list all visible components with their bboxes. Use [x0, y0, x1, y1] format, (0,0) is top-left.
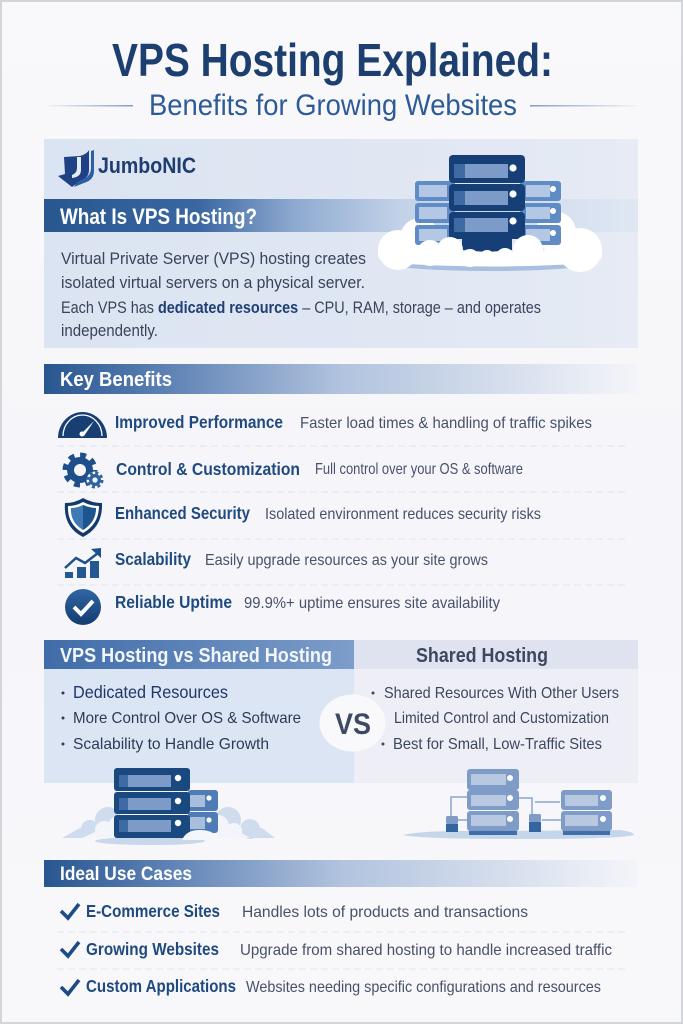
- use case: custom applications: Websites needing specific configurations and resources: [246, 979, 601, 996]
- subtitle: Benefits for Growing Websites: [149, 89, 517, 122]
- icon: gears: [65, 455, 104, 488]
- panel: VPS hosting column: More Control Over OS & Software: [73, 710, 301, 727]
- illustration: server stack on cloud: [378, 155, 602, 272]
- heading banner: ideal use cases: Ideal Use Cases: [60, 863, 192, 885]
- logo: JumboNIC: JumboNIC: [98, 153, 196, 178]
- panel: VPS hosting column: VPS Hosting vs Shared Hosting: [60, 644, 332, 667]
- benefit: enhanced security: Enhanced Security: [115, 503, 250, 523]
- benefit: enhanced security: Isolated environment reduces security risks: [265, 506, 541, 523]
- text: VPS description: [61, 249, 541, 340]
- benefit: scalability: [115, 549, 488, 569]
- use case: growing websites: Upgrade from shared hosting to handle increased traffic: [240, 942, 612, 959]
- use case: e-commerce sites: [61, 901, 528, 921]
- panel: what is VPS hosting: [44, 139, 638, 348]
- benefit: scalability: Easily upgrade resources as your site grows: [205, 552, 488, 569]
- text: VPS description: Virtual Private Server (VPS) hosting creates: [61, 249, 366, 268]
- icon: speedometer: [58, 412, 107, 438]
- heading banner: key benefits: Key Benefits: [60, 369, 172, 391]
- panel: VPS hosting column: Dedicated Resources: [73, 682, 228, 702]
- benefit: improved performance: Improved Performance: [115, 412, 283, 432]
- panel: shared hosting column: Limited Control and Customization: [394, 710, 609, 727]
- use case: custom applications: [61, 976, 601, 996]
- panel: shared hosting column: Shared Hosting: [416, 644, 548, 667]
- title: VPS Hosting Explained:: [112, 34, 553, 86]
- VS badge: VS: [335, 708, 371, 741]
- panel: shared hosting column: Shared Resources With Other Users: [384, 685, 619, 702]
- benefit: control and customization: [116, 459, 523, 479]
- panel: VPS hosting column: [44, 640, 354, 783]
- benefit: reliable uptime: 99.9%+ uptime ensures site availability: [244, 595, 500, 612]
- use case: e-commerce sites: E-Commerce Sites: [86, 901, 220, 921]
- panel: shared hosting column: Best for Small, Low-Traffic Sites: [393, 736, 602, 753]
- benefit: control and customization: Control & Customization: [116, 459, 300, 479]
- benefit: reliable uptime: Reliable Uptime: [115, 592, 232, 612]
- illustration: shared servers network: [403, 769, 634, 839]
- heading banner: what is VPS hosting: [44, 199, 638, 232]
- text: VPS description: Each VPS has dedicated resources – CPU, RAM, storage – and operates: [61, 298, 541, 317]
- panel: shared hosting column: [354, 640, 638, 783]
- heading banner: what is VPS hosting: What Is VPS Hosting?: [60, 204, 257, 229]
- heading banner: ideal use cases: [44, 860, 638, 887]
- VS badge: [320, 694, 386, 752]
- use case: e-commerce sites: Handles lots of products and transactions: [242, 904, 528, 921]
- use case: growing websites: [61, 939, 612, 959]
- text: VPS description: isolated virtual servers on a physical server.: [61, 273, 365, 292]
- benefit: improved performance: [115, 412, 592, 432]
- logo: JumboNIC: [58, 150, 196, 187]
- icon: shield: [65, 498, 102, 537]
- use case: custom applications: Custom Applications: [86, 976, 236, 996]
- benefit: scalability: Scalability: [115, 549, 191, 569]
- icon: uptime check: [65, 589, 101, 625]
- illustration: VPS servers on clouds: [62, 768, 275, 845]
- benefit: control and customization: Full control over your OS & software: [315, 461, 523, 478]
- use case: growing websites: Growing Websites: [86, 939, 219, 959]
- benefit: improved performance: Faster load times & handling of traffic spikes: [300, 415, 592, 432]
- benefit: reliable uptime: [115, 592, 500, 612]
- heading banner: key benefits: [44, 364, 638, 394]
- text: VPS description: independently.: [61, 321, 158, 340]
- benefit: enhanced security: [115, 503, 541, 523]
- icon: growth chart: [65, 548, 101, 578]
- panel: VPS hosting column: Scalability to Handle Growth: [73, 736, 269, 753]
